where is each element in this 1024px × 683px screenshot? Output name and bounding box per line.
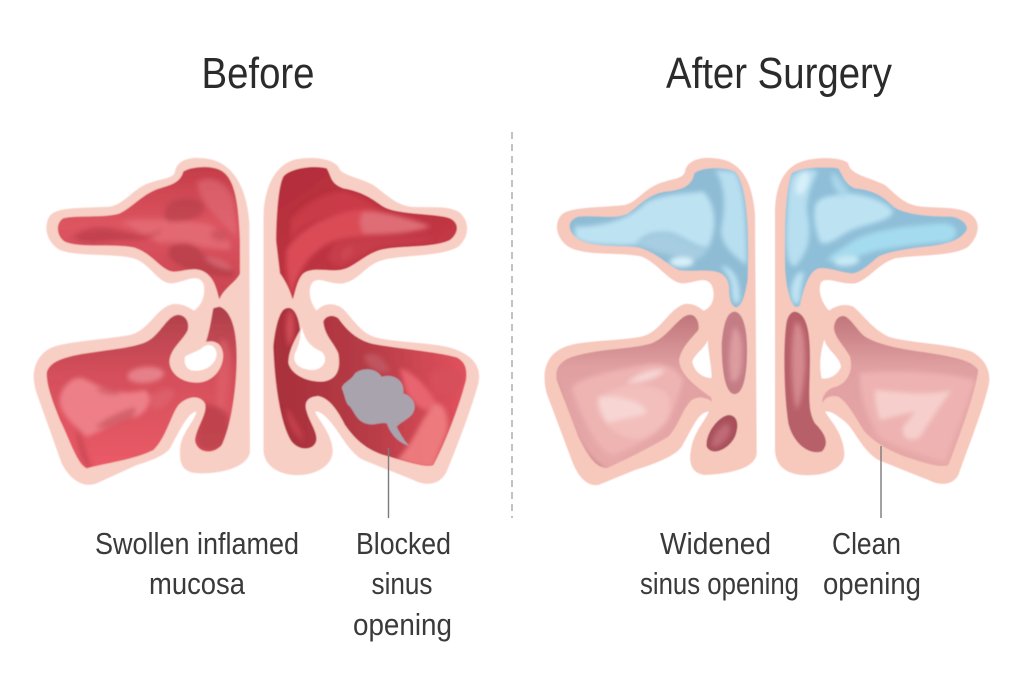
lower sinus cavity [43,303,240,473]
label: Swollen inflamed mucosa: Swollen inflamed [95,526,299,561]
pink mucosa outline [775,158,989,484]
label: Blocked sinus opening: opening [353,607,452,642]
lower small cavity [707,415,737,451]
label: Clean opening: Clean [832,526,901,561]
white opening [692,340,712,378]
divider between before and after [511,132,513,518]
panel: before, left sinus [34,158,250,485]
medial cavity [784,312,826,452]
label: Blocked sinus opening [353,526,452,642]
label: Swollen inflamed mucosa [95,526,299,601]
panel: before, right sinus [263,158,479,484]
white opening [820,339,841,379]
lower maxillary cavity [556,314,712,468]
upper sinus cavity [57,166,241,300]
white opening [294,327,325,370]
title: After Surgery: After Surgery [666,49,892,98]
pink mucosa outline [34,158,250,485]
pink mucosa outline [545,158,757,485]
label: Widened sinus opening: sinus opening [640,566,799,601]
pink mucosa outline [263,158,479,484]
label: Blocked sinus opening: Blocked [356,526,451,561]
icon: grey blockage cloud [342,369,415,446]
upper sinus cavity, clear [569,168,749,308]
lower sinus cavity [270,303,470,470]
label: Clean opening: opening [823,566,921,601]
title: Before: Before [202,49,314,98]
upper sinus cavity, clear [782,163,972,310]
label: Widened sinus opening: Widened [660,526,771,561]
upper sinus cavity [275,166,458,300]
panel: after, right sinus [775,158,989,484]
leader line: clean opening [880,446,882,518]
label: Swollen inflamed mucosa: mucosa [149,566,246,601]
medial cavity [722,312,747,394]
leader line: blocked opening [388,448,390,518]
label: Clean opening [823,526,921,601]
label: Blocked sinus opening: sinus [372,566,432,601]
lower maxillary cavity [822,316,978,466]
panel: after, left sinus [545,158,757,485]
white opening [185,345,217,371]
label: Widened sinus opening [640,526,799,601]
